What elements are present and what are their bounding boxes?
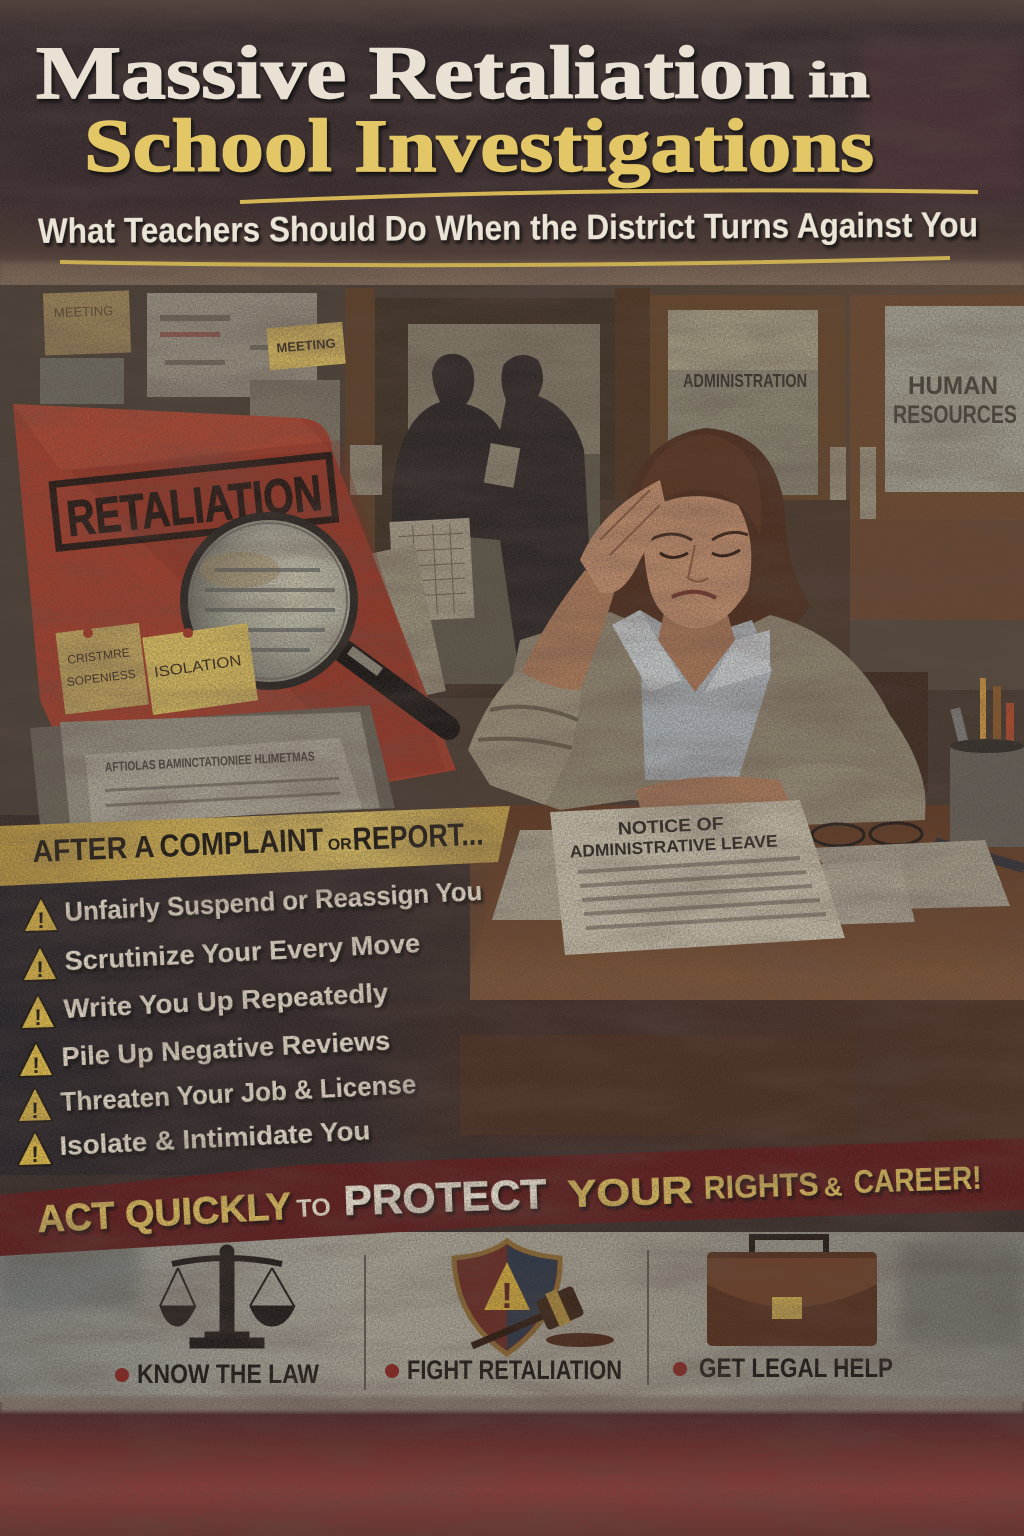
door: administration: ADMINISTRATION <box>683 371 807 391</box>
desk <box>470 805 1024 1003</box>
note: isolation <box>142 623 258 715</box>
eyeglasses and pen <box>812 823 1024 868</box>
label: fight retaliation: FIGHT RETALIATION <box>407 1355 622 1385</box>
list heading banner: AFTER A <box>32 829 155 869</box>
hand <box>580 480 667 593</box>
chair back <box>860 672 928 792</box>
list item 2: Scrutinize Your Every Move <box>64 928 421 976</box>
list item 1: ! <box>37 908 45 933</box>
papers under folder: AFTIOLAS BAMINCTATIONIEE HLIMETMAS <box>105 749 315 774</box>
door: human resources: HUMAN <box>908 372 998 400</box>
list item 4: ! <box>32 1053 40 1078</box>
sticky notes on folder <box>55 623 258 715</box>
door: administration <box>650 295 845 805</box>
banner: call to action: RIGHTS <box>703 1166 819 1206</box>
cardigan body <box>490 612 926 815</box>
banner: call to action: PROTECT <box>343 1170 548 1224</box>
list heading banner: REPORT... <box>352 816 484 857</box>
list item 2: ! <box>36 957 44 982</box>
banner: call to action: & <box>823 1171 843 1202</box>
decorative gold line lower <box>60 258 950 265</box>
banner: call to action: CAREER! <box>853 1160 982 1200</box>
shirt <box>612 610 772 780</box>
scene: office background <box>0 285 1024 815</box>
icon: shield and gavel <box>454 1241 614 1354</box>
header band <box>0 0 1024 286</box>
lower wood panel <box>0 1000 1024 1150</box>
right cuff <box>775 763 925 825</box>
note: cristmre sopeniess <box>55 623 149 715</box>
papers on desk <box>492 830 1010 925</box>
icon: scales of justice <box>160 1245 295 1348</box>
list item 5: Threaten Your Job & License <box>60 1069 417 1117</box>
list heading banner: COMPLAINT <box>159 821 325 864</box>
note: cristmre sopeniess: CRISTMRE <box>67 645 130 667</box>
title <box>36 32 874 188</box>
door handles <box>830 447 876 519</box>
list item 3: ! <box>34 1005 42 1030</box>
rolled sleeve <box>468 665 582 805</box>
list item 6: ! <box>31 1142 39 1167</box>
title: in <box>808 52 870 109</box>
hand on desk <box>636 777 800 808</box>
title: School Investigations <box>84 105 874 188</box>
list heading banner <box>0 806 510 886</box>
icon: magnifying glass <box>184 516 448 728</box>
panel: action icons <box>0 1232 1024 1402</box>
list item 3: Write You Up Repeatedly <box>63 978 389 1024</box>
note: meeting yellow <box>266 322 346 370</box>
note: meeting left: MEETING <box>54 303 113 320</box>
door: human resources <box>850 295 1024 805</box>
window with silhouettes <box>375 298 615 698</box>
panel: red retaliation folder <box>13 404 456 790</box>
label: get legal help: GET LEGAL HELP <box>699 1353 893 1383</box>
list item 6: Isolate & Intimidate You <box>59 1115 371 1161</box>
note: cristmre sopeniess: SOPENIESS <box>66 667 136 689</box>
title: Massive Retaliation <box>36 32 794 115</box>
stacked papers behind folder <box>341 445 475 707</box>
banner: call to action: TO <box>296 1193 332 1223</box>
footer band <box>0 1396 1024 1536</box>
panel: warning list <box>0 806 510 1175</box>
icon: shield and gavel: ! <box>501 1275 513 1316</box>
document: notice of administrative leave: ADMINISTRATIVE LEAVE <box>569 832 778 861</box>
icon: pencil cup <box>950 678 1024 847</box>
note: meeting left <box>43 290 131 355</box>
neck <box>658 595 735 692</box>
decorative gold line upper <box>240 190 978 202</box>
list item 4: Pile Up Negative Reviews <box>61 1025 391 1072</box>
document: notice of administrative leave <box>550 800 845 955</box>
list item 1: Unfairly Suspend or Reassign You <box>64 876 483 927</box>
papers under folder <box>30 705 395 825</box>
banner: call to action: YOUR <box>567 1170 693 1216</box>
list item 5: ! <box>31 1098 39 1123</box>
document: notice of administrative leave: NOTICE OF <box>617 813 724 839</box>
stamp: retaliation: RETALIATION <box>64 465 325 547</box>
banner: call to action: ACT QUICKLY <box>36 1186 292 1241</box>
note: isolation: ISOLATION <box>153 652 243 681</box>
list heading banner: OR <box>327 836 353 854</box>
hair back <box>602 428 810 645</box>
note: meeting yellow: MEETING <box>276 335 336 356</box>
hair top <box>636 434 761 535</box>
woman figure <box>468 428 928 825</box>
label: know the law: KNOW THE LAW <box>137 1359 319 1389</box>
face <box>644 496 751 628</box>
bulletin board notes <box>40 290 346 480</box>
forearm <box>522 570 615 690</box>
banner: call to action <box>0 1138 1024 1256</box>
icon: briefcase <box>707 1237 877 1346</box>
